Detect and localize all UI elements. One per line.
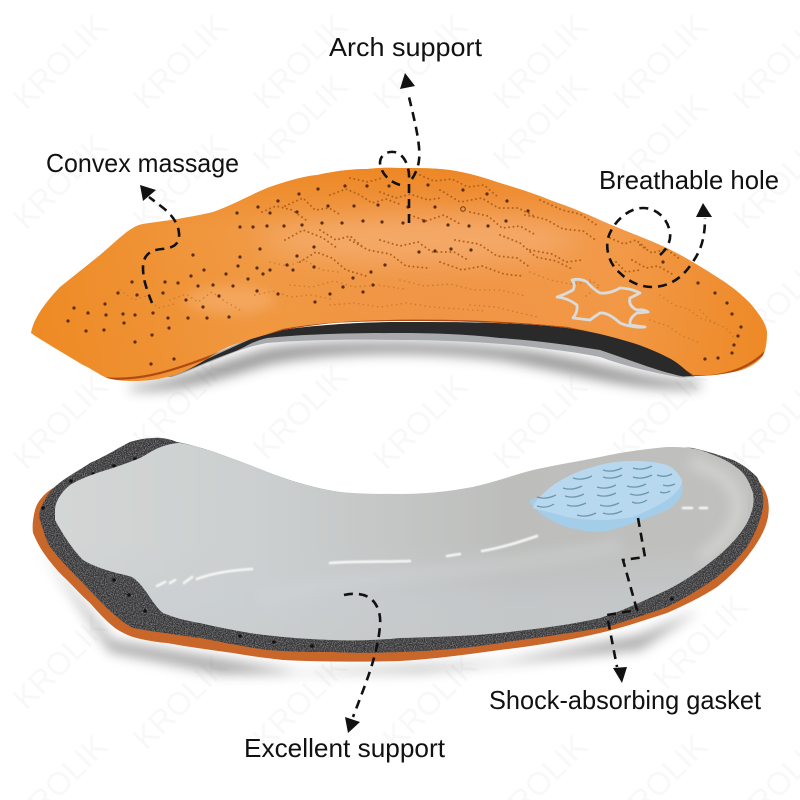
callout: Excellent support [244, 594, 446, 763]
watermark: repeated KROLIK: KROLIK [486, 368, 594, 476]
watermark: repeated KROLIK: KROLIK [486, 68, 594, 176]
bottom insole: gel side [33, 438, 769, 674]
small perforation rows [262, 175, 680, 276]
label: Convex massage: Convex massage [46, 148, 239, 178]
gel shading and highlights [105, 459, 744, 640]
label: Shock-absorbing gasket: Shock-absorbing gasket [489, 685, 762, 715]
watermark: repeated KROLIK: KROLIK [246, 8, 354, 116]
watermark: repeated KROLIK: KROLIK [606, 88, 714, 196]
watermark: repeated KROLIK: KROLIK [6, 368, 114, 476]
pad top surface [533, 461, 682, 520]
watermark: repeated KROLIK: KROLIK [606, 358, 714, 466]
arrowhead: Convex massage [140, 185, 156, 201]
label: Excellent support: Excellent support [244, 733, 446, 763]
faint pinpoints [120, 260, 736, 342]
callout: Shock-absorbing gasket [489, 518, 762, 715]
label: Breathable hole: Breathable hole [599, 165, 779, 195]
watermark: repeated KROLIK: KROLIK [126, 128, 234, 236]
watermark: repeated KROLIK: KROLIK [646, 588, 754, 696]
leather surface [31, 168, 767, 381]
large perforation holes [68, 185, 741, 364]
watermark: repeated KROLIK: KROLIK [366, 8, 474, 116]
dark foam layer [39, 438, 763, 653]
watermark: repeated KROLIK: KROLIK [486, 8, 594, 116]
dashed circle and arrow: Breathable hole [607, 208, 705, 287]
arrowhead: Shock-absorbing gasket [613, 667, 627, 683]
top insole: orange leather side [20, 160, 780, 391]
watermark: repeated KROLIK: KROLIK [126, 348, 234, 456]
pad side [530, 470, 683, 532]
bottom insole shadow [40, 548, 700, 674]
arrowhead: Breathable hole [696, 203, 712, 217]
callout: Breathable hole [599, 165, 779, 287]
icon: leather hide mark [557, 279, 648, 327]
callout: Arch support [329, 32, 483, 223]
dashed arrow: Excellent support [344, 594, 380, 717]
blue shock pad [530, 461, 683, 532]
dark underside layer [168, 322, 720, 377]
watermark: repeated KROLIK: KROLIK [246, 648, 354, 756]
watermark: repeated KROLIK: KROLIK [126, 8, 234, 116]
watermark: repeated KROLIK: KROLIK [376, 648, 484, 756]
foam holes [43, 459, 672, 646]
dashed arrow: Convex massage [143, 197, 179, 303]
dashed arrow and loop: Arch support [380, 93, 419, 223]
pad ripple texture [537, 466, 675, 516]
watermark: repeated KROLIK: KROLIK [6, 8, 114, 116]
watermark: repeated KROLIK: KROLIK [246, 68, 354, 176]
gel surface [55, 443, 754, 640]
watermark: repeated KROLIK: KROLIK [246, 358, 354, 466]
top insole shadow [130, 342, 700, 391]
callout: Convex massage [46, 148, 239, 303]
dashed arrow: Shock-absorbing gasket [607, 518, 645, 667]
watermark: repeated KROLIK: KROLIK [6, 608, 114, 716]
label: Arch support: Arch support [329, 32, 483, 62]
orange rim [33, 467, 769, 662]
arrowhead: Excellent support [345, 717, 360, 733]
watermark: repeated KROLIK: KROLIK [126, 648, 234, 756]
watermark: repeated KROLIK: KROLIK [606, 8, 714, 116]
grey underside strip [168, 322, 695, 378]
arrowhead: Arch support [400, 73, 415, 89]
watermark: repeated KROLIK: KROLIK [366, 368, 474, 476]
leather shading [66, 168, 764, 381]
watermark: repeated KROLIK: KROLIK [6, 128, 114, 236]
